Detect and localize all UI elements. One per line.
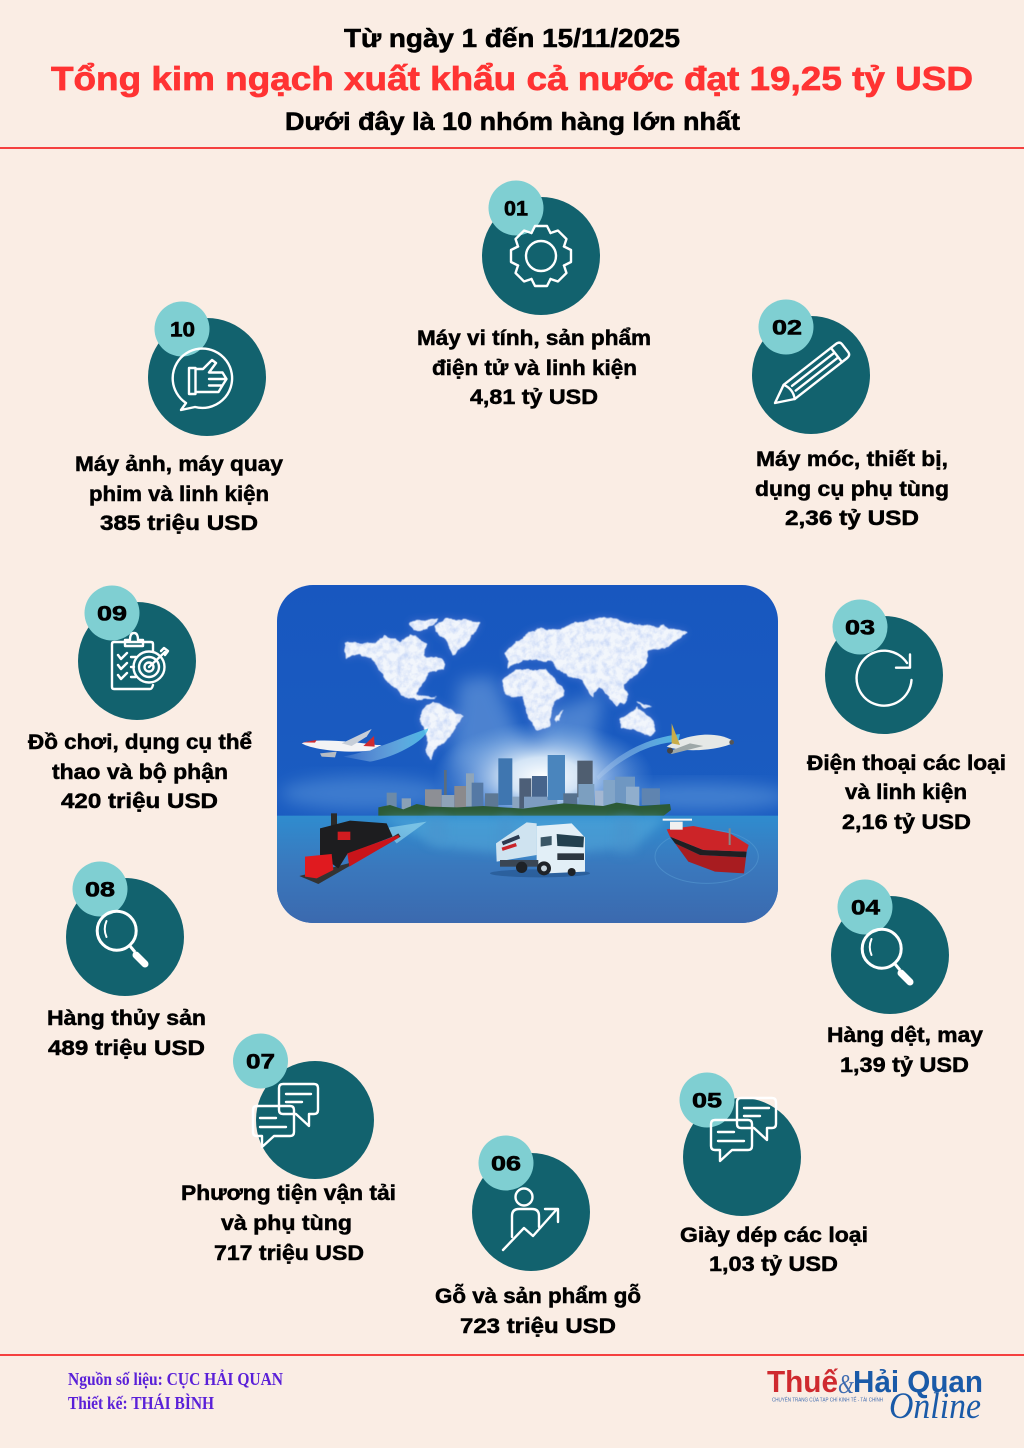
badge number 06: 06 (491, 1152, 521, 1176)
icon: magnifier (862, 929, 910, 982)
icon: pencil (769, 341, 851, 410)
left plane (302, 729, 382, 757)
world map clouds (345, 617, 687, 760)
label 08 (47, 1007, 206, 1060)
truck (490, 822, 590, 877)
trees (378, 803, 671, 816)
label 09 (28, 731, 252, 813)
panel: item 05 footwear (680, 1072, 868, 1276)
reflection (380, 817, 667, 857)
panel: central transport and world map illustration (270, 585, 790, 929)
label 07 (181, 1182, 396, 1265)
label 10: Máy ảnh, máy quay (75, 453, 283, 476)
label 03: Điện thoại các loại (807, 752, 1006, 775)
badge number 08: 08 (85, 878, 115, 902)
label 07: 717 triệu USD (214, 1242, 364, 1265)
label 02: Máy móc, thiết bị, (756, 448, 948, 471)
panel: item 10 cameras (75, 302, 283, 535)
label 09: Đồ chơi, dụng cụ thể (28, 731, 252, 754)
label 02: dụng cụ phụ tùng (755, 478, 949, 501)
badge number 02: 02 (772, 316, 802, 340)
label 03 (807, 752, 1006, 834)
badge number 01: 01 (504, 198, 528, 220)
label 05: Giày dép các loại (680, 1224, 868, 1247)
label 06: 723 triệu USD (460, 1315, 616, 1338)
badge number 05: 05 (692, 1090, 722, 1112)
label 04: Hàng dệt, may (827, 1024, 983, 1047)
label 06 (435, 1284, 641, 1338)
skyline (387, 755, 660, 810)
label 04 (827, 1024, 983, 1077)
badge number 07: 07 (246, 1050, 275, 1074)
header (51, 23, 973, 136)
badge number 09: 09 (97, 602, 127, 626)
footer credits: Thiết kế: THÁI BÌNH (68, 1393, 214, 1413)
label 07: và phụ tùng (221, 1212, 352, 1235)
panel: item 03 phones (807, 600, 1006, 834)
light rays (450, 677, 603, 767)
panel: item 06 wood (435, 1136, 641, 1338)
icon: thumbs-up speech bubble (173, 349, 232, 410)
panel: item 07 vehicles (181, 1034, 396, 1265)
icon: gear (511, 226, 571, 286)
label 08: 489 triệu USD (48, 1037, 205, 1060)
panel: item 02 machinery (752, 300, 949, 530)
label 05 (680, 1224, 868, 1276)
panel: item 09 toys and sports (28, 586, 252, 813)
label 10: 385 triệu USD (100, 512, 258, 535)
logo: Thuế & Hải Quan Online: & (838, 1369, 854, 1399)
heading: subtitle: Dưới đây là 10 nhóm hàng lớn nhất (285, 108, 741, 136)
label 09: 420 triệu USD (61, 790, 218, 813)
label 09: thao và bộ phận (52, 761, 228, 784)
icon: chat bubbles (711, 1098, 776, 1161)
label 01: Máy vi tính, sản phẩm (417, 327, 651, 350)
train trail (388, 822, 426, 844)
label 03: 2,16 tỷ USD (842, 811, 971, 834)
logo: Thuế & Hải Quan Online: Hải Quan (853, 1364, 983, 1399)
label 01: điện tử và linh kiện (432, 357, 637, 380)
label 01: 4,81 tỷ USD (470, 386, 598, 409)
label 10: phim và linh kiện (89, 483, 269, 506)
label 02: 2,36 tỷ USD (785, 507, 919, 530)
badge number 04: 04 (851, 896, 880, 920)
heading: main title: Tổng kim ngạch xuất khẩu cả nước đạt 19,25 tỷ USD (51, 61, 973, 98)
logo: Thuế & Hải Quan Online: Online (889, 1386, 981, 1427)
logo: Thuế & Hải Quan Online: Thuế (767, 1364, 839, 1399)
logo: Thuế & Hải Quan Online: CHUYÊN TRANG CỦA TẠP CHÍ KINH TẾ - TÀI CHÍNH (772, 1396, 883, 1404)
label 07: Phương tiện vận tải (181, 1182, 396, 1205)
label 05: 1,03 tỷ USD (709, 1253, 838, 1276)
label 06: Gỗ và sản phẩm gỗ (435, 1284, 641, 1308)
icon: clipboard with target (112, 633, 168, 689)
plane trails (343, 728, 428, 762)
label 10 (75, 453, 283, 535)
panel: item 01 computers and electronics (417, 180, 651, 409)
footer credits: Nguồn số liệu: CỤC HẢI QUAN (68, 1369, 283, 1389)
icon: refresh arrow (857, 651, 912, 706)
badge number 03: 03 (845, 616, 875, 640)
icon: chat bubbles (253, 1084, 318, 1147)
right plane (667, 723, 734, 754)
heading: date range: Từ ngày 1 đến 15/11/2025 (344, 23, 680, 53)
footer credits (68, 1369, 283, 1413)
locomotive (299, 813, 401, 884)
label 01 (417, 327, 651, 409)
panel: item 04 textiles (827, 880, 983, 1077)
panel: item 08 seafood (47, 862, 206, 1060)
label 03: và linh kiện (845, 781, 967, 804)
badge number 10: 10 (170, 318, 195, 342)
label 04: 1,39 tỷ USD (840, 1054, 969, 1077)
icon: magnifier (97, 911, 145, 964)
label 02 (755, 448, 949, 530)
logo: Thuế & Hải Quan Online (767, 1364, 983, 1427)
ship (655, 819, 758, 883)
label 08: Hàng thủy sản (47, 1007, 206, 1030)
icon: person with rising arrow (503, 1188, 558, 1250)
